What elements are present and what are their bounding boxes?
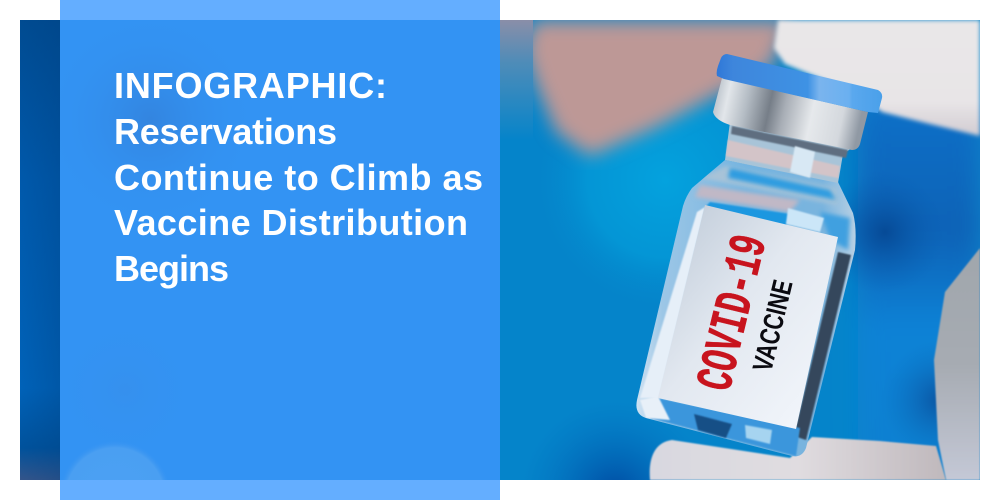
title: Reservations <box>114 111 337 152</box>
panel subtle photo texture <box>66 81 190 480</box>
glove: top right fingers <box>774 20 980 136</box>
vial label <box>658 205 838 429</box>
left background strip <box>20 20 60 480</box>
shoulder glass streaks <box>700 166 838 205</box>
panel: title block <box>60 0 500 500</box>
label text: VACCINE: VACCINE <box>747 277 799 374</box>
vial <box>636 54 882 456</box>
title: Vaccine Distribution <box>114 202 468 243</box>
blurred background tones <box>500 20 980 480</box>
title: Continue to Climb as <box>114 157 483 198</box>
title <box>114 65 483 289</box>
vial blue cap <box>717 54 882 113</box>
highlight in liquid <box>786 208 824 232</box>
vial metal crimp <box>713 78 868 150</box>
vial glass body <box>636 160 856 456</box>
title: Begins <box>114 248 229 289</box>
dark liquid edge <box>794 252 851 440</box>
vial neck <box>725 122 852 183</box>
white liquid edge <box>640 207 705 398</box>
panel top and bottom light band <box>60 0 500 500</box>
glove: bottom thumb <box>650 437 946 480</box>
vial bottom contents <box>650 398 800 456</box>
label text: COVID-19: COVID-19 <box>687 229 781 397</box>
panel main blue <box>60 20 500 480</box>
blue liquid under shoulder <box>706 202 790 226</box>
title: INFOGRAPHIC: <box>114 65 387 106</box>
glove: right hand <box>934 248 980 480</box>
